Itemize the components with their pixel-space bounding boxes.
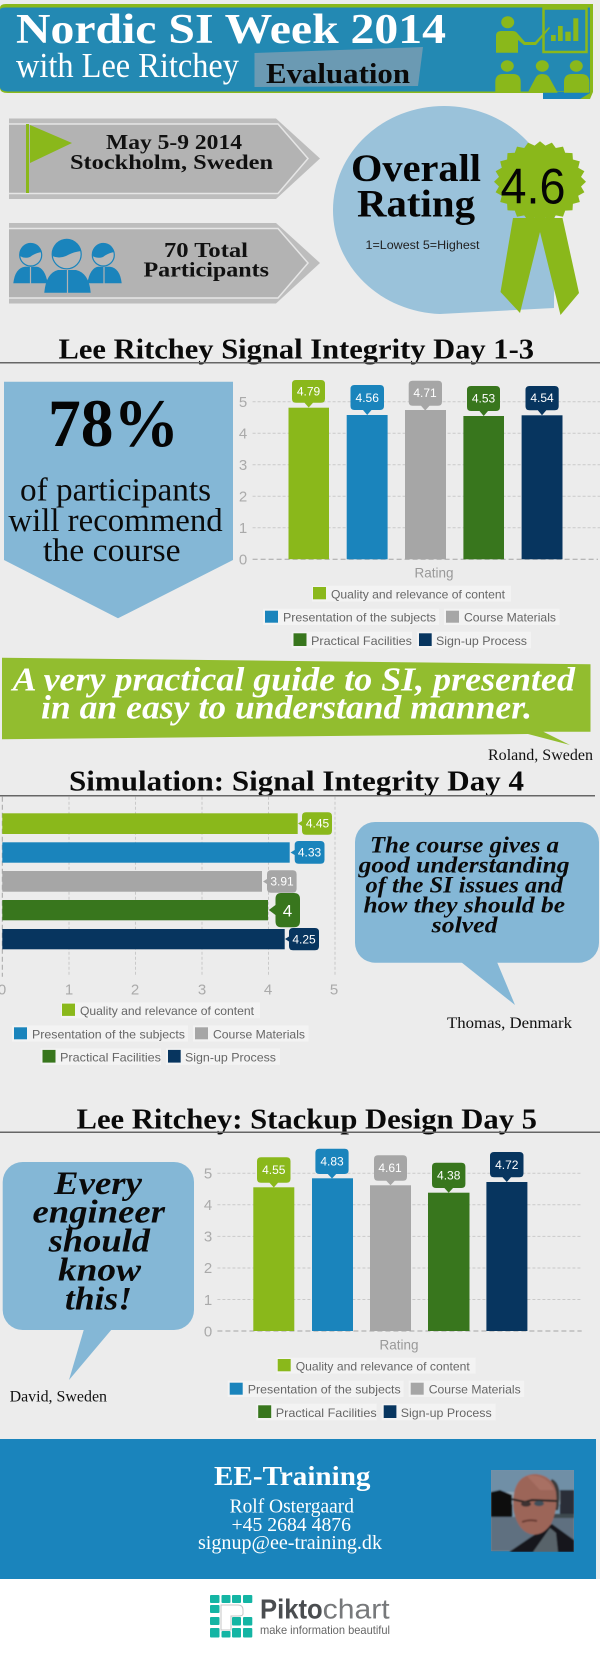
logo wordmark: Pikto — [260, 1593, 323, 1624]
rating value: 4.6 — [500, 158, 566, 214]
evaluation tag — [254, 47, 423, 90]
quote banner: practical guide — [2, 658, 590, 745]
legend: Sign-up Process — [401, 1406, 492, 1420]
legend: Sign-up Process — [185, 1051, 276, 1065]
quote attribution: Thomas: Thomas, Denmark — [447, 1015, 572, 1032]
speech bubble: every engineer — [3, 1162, 194, 1380]
evaluation tag: Evaluation — [266, 58, 410, 90]
contact details: signup@ee-training.dk — [198, 1532, 382, 1554]
rating heading: Overall — [351, 147, 481, 190]
rating heading — [351, 147, 481, 226]
y axis labels: 2 — [239, 488, 247, 506]
horizontal bar chart: day 4 ratings — [0, 797, 338, 1065]
bar: practical facilities 4.53 — [463, 386, 504, 559]
y axis labels: 3 — [239, 457, 247, 474]
bar: sign-up process 4.54: 4.54 — [530, 391, 554, 405]
bar: practical facilities 4.38 — [428, 1163, 470, 1331]
y axis labels — [204, 1166, 212, 1340]
bar: quality 4.55: 4.55 — [262, 1163, 286, 1177]
quote attribution: Roland: Roland, Sweden — [488, 747, 593, 764]
legend: Course Materials — [464, 611, 556, 625]
bar: course materials 4.71 — [405, 381, 446, 559]
rating heading: Rating — [357, 183, 476, 226]
bar chart: day 5 ratings — [204, 1149, 582, 1420]
speech bubble: good understanding — [355, 822, 599, 1005]
logo mark — [210, 1595, 252, 1638]
legend: Sign-up Process — [436, 634, 527, 648]
axis title: Rating — [380, 1336, 418, 1352]
bar: sign-up process 4.72 — [486, 1152, 527, 1331]
bar: sign-up process 4.72: 4.72 — [495, 1158, 519, 1172]
bar: practical facilities 4: 4 — [283, 902, 292, 920]
y axis labels: 1 — [239, 520, 247, 537]
icon: three people — [13, 239, 122, 293]
x axis labels: 5 — [330, 981, 338, 998]
Piktochart logo — [210, 1593, 390, 1638]
header banner — [0, 4, 593, 99]
quote text: know — [58, 1253, 142, 1289]
bar: presentation 4.83: 4.83 — [320, 1154, 344, 1168]
legend: Practical Facilities — [276, 1406, 377, 1420]
y axis labels: 4 — [204, 1197, 212, 1214]
quote text — [357, 833, 570, 938]
quote text: how they should be — [364, 893, 565, 918]
heading: signal integrity day 1-3: Lee Ritchey Signal Integrity Day 1-3 — [58, 333, 534, 365]
quote text: of the SI issues and — [366, 873, 564, 898]
contact details: +45 2684 4876 — [232, 1514, 351, 1536]
legend — [228, 1358, 524, 1420]
quote text: Every — [53, 1166, 142, 1202]
bar: course materials 4.61 — [370, 1155, 411, 1331]
icon: green flag — [26, 124, 72, 193]
stat caption: of participants — [20, 473, 211, 509]
bar: quality 4.45 — [2, 812, 332, 835]
y axis labels: 5 — [204, 1166, 212, 1182]
subtitle: with Lee Ritchey — [16, 46, 239, 85]
stat caption — [8, 473, 223, 569]
y axis labels: 3 — [204, 1228, 212, 1246]
x axis labels: 1 — [65, 981, 73, 998]
date and location text — [70, 130, 273, 174]
rating scale note: 1=Lowest 5=Highest — [366, 238, 480, 252]
contact details: Rolf Ostergaard — [230, 1496, 354, 1518]
icon: presenter and audience — [495, 8, 589, 93]
quote text: this! — [65, 1281, 132, 1317]
bar: presentation 4.56 — [347, 385, 388, 559]
legend — [263, 586, 560, 648]
footer contact panel — [0, 1439, 596, 1579]
heading: simulation day 4: Simulation: Signal Integrity Day 4 — [69, 766, 524, 798]
date and location text: Stockholm, Sweden — [70, 150, 273, 174]
bar: presentation 4.83 — [312, 1149, 353, 1331]
company name: EE-Training — [214, 1461, 371, 1491]
quote text: good understanding — [357, 853, 570, 878]
portrait photo — [491, 1470, 574, 1552]
x axis labels: 3 — [198, 981, 206, 998]
legend: Quality and relevance of content — [331, 587, 506, 601]
legend: Practical Facilities — [311, 634, 412, 648]
icon: ribbon rosette — [494, 141, 586, 315]
quote attribution: David: David, Sweden — [10, 1389, 107, 1406]
x axis labels: 2 — [131, 981, 139, 998]
bar: quality 4.45: 4.45 — [306, 816, 330, 830]
y axis labels: 4 — [239, 426, 247, 442]
y axis labels: 5 — [239, 394, 247, 411]
overall rating badge — [333, 106, 586, 315]
bar: presentation 4.56: 4.56 — [356, 391, 379, 405]
y axis labels: 0 — [204, 1323, 212, 1340]
quote text — [32, 1166, 166, 1317]
x axis labels — [0, 981, 338, 998]
bar: presentation 4.33 — [2, 841, 325, 864]
legend: Presentation of the subjects — [248, 1383, 401, 1397]
bar: quality 4.79: 4.79 — [297, 384, 321, 398]
bar: presentation 4.33: 4.33 — [298, 846, 322, 860]
quote text: The course gives a — [370, 833, 559, 858]
y axis labels: 1 — [204, 1292, 212, 1309]
legend: Quality and relevance of content — [80, 1004, 255, 1018]
legend: Course Materials — [429, 1383, 521, 1397]
legend: Course Materials — [213, 1027, 305, 1041]
participants text: Participants — [144, 258, 269, 282]
bar: sign-up process 4.25: 4.25 — [292, 932, 316, 946]
date and location text: May 5-9 2014 — [106, 130, 243, 154]
legend: Presentation of the subjects — [283, 611, 436, 625]
bar: course materials 3.91: 3.91 — [270, 874, 294, 888]
bar: course materials 4.61: 4.61 — [378, 1161, 402, 1175]
bar: practical facilities 4 — [2, 893, 300, 927]
panel: 78 percent recommend — [4, 382, 233, 618]
bar: sign-up process 4.25 — [2, 928, 319, 950]
logo wordmark light: chart — [323, 1593, 390, 1624]
bar: practical facilities 4.53: 4.53 — [472, 392, 496, 406]
stat caption: will recommend — [8, 503, 223, 539]
axis title: Rating — [414, 564, 454, 580]
quote text — [10, 662, 576, 726]
big stat: 78% — [48, 385, 179, 461]
contact details — [198, 1496, 382, 1554]
bar: sign-up process 4.54 — [522, 386, 562, 559]
legend: Practical Facilities — [60, 1051, 161, 1065]
participants text: 70 Total — [164, 238, 248, 262]
heading: stackup design day 5: Lee Ritchey: Stackup Design Day 5 — [76, 1103, 537, 1135]
logo tagline: make information beautiful — [260, 1623, 390, 1637]
quote text: solved — [431, 913, 498, 938]
title: Nordic SI Week 2014 — [16, 7, 446, 53]
bar: quality 4.55 — [253, 1157, 294, 1331]
quote text: should — [47, 1224, 151, 1260]
info arrow: date and location — [9, 118, 320, 199]
quote text: in an easy to understand manner. — [41, 689, 532, 726]
quote text: engineer — [32, 1195, 166, 1231]
bar: practical facilities 4.38: 4.38 — [437, 1168, 461, 1182]
info arrow: participants — [9, 223, 320, 304]
quote text: A very practical guide to SI, presented — [10, 662, 576, 699]
legend: Quality and relevance of content — [296, 1359, 470, 1373]
bar: course materials 4.71: 4.71 — [413, 386, 437, 400]
x axis labels: 4 — [264, 981, 272, 998]
participants text — [144, 238, 269, 282]
y axis labels: 0 — [239, 552, 247, 568]
y axis labels: 2 — [204, 1260, 212, 1277]
bar chart: day 1-3 ratings — [239, 380, 600, 648]
legend — [12, 1002, 308, 1065]
stat caption: the course — [43, 533, 181, 569]
legend: Presentation of the subjects — [32, 1027, 185, 1041]
bar: quality 4.79 — [288, 380, 329, 559]
bar: course materials 3.91 — [2, 870, 297, 893]
y axis labels — [239, 394, 247, 568]
